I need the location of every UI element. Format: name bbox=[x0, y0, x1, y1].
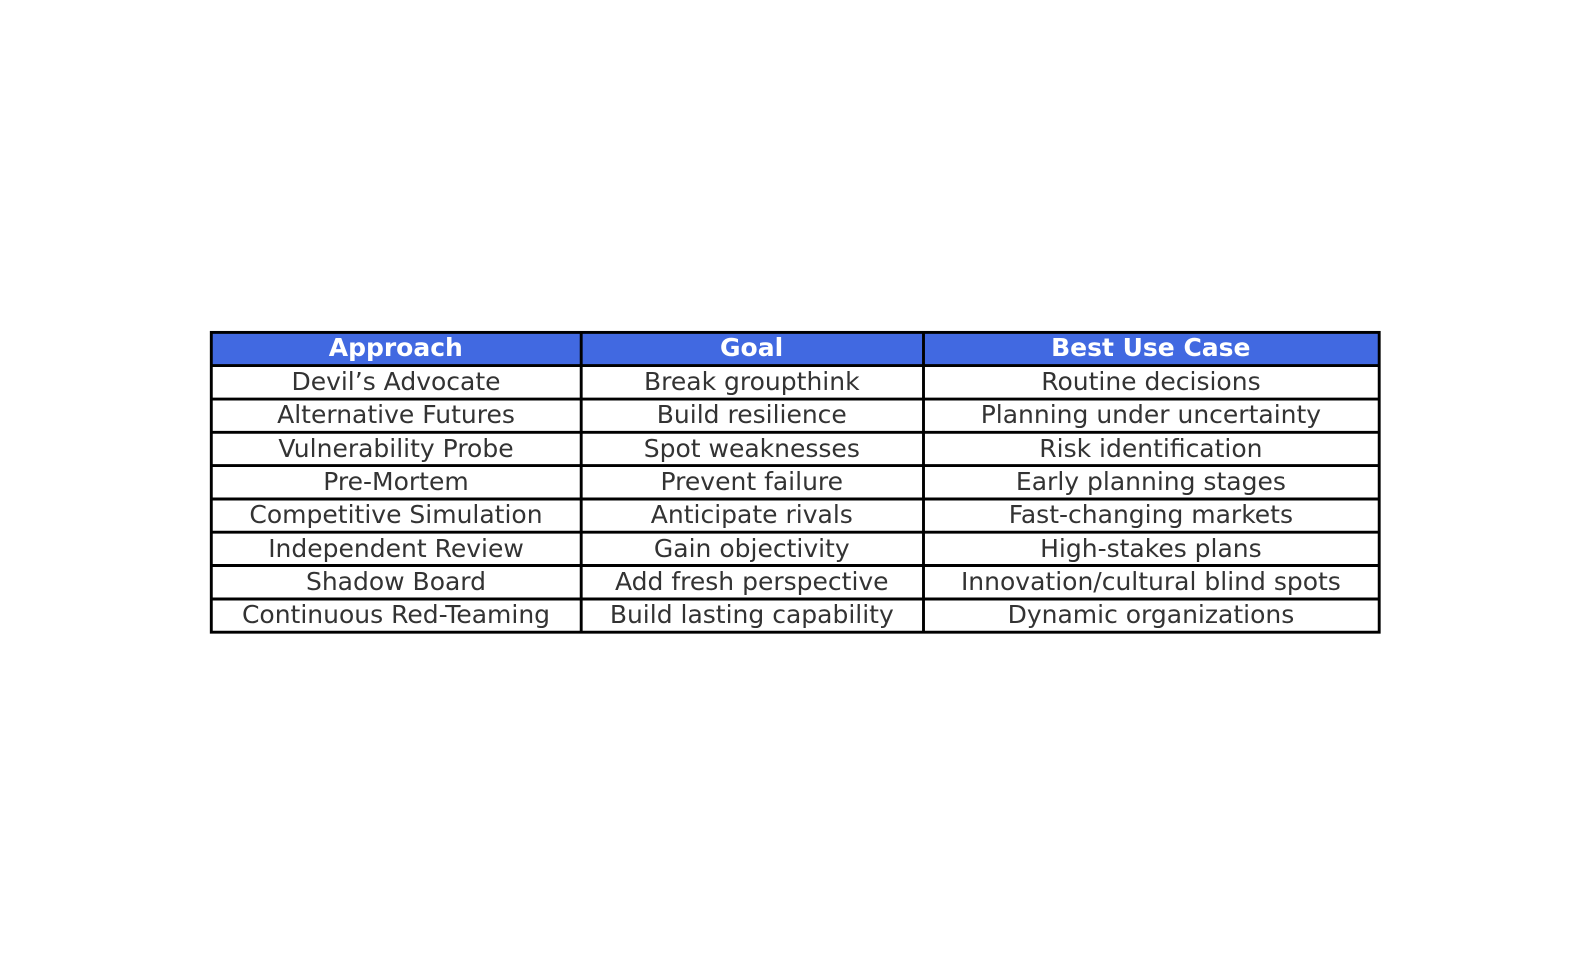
column: approach: Continuous Red-Teaming bbox=[242, 600, 550, 629]
column: approach: Competitive Simulation bbox=[249, 500, 543, 529]
column: approach: Independent Review bbox=[268, 534, 524, 563]
column: approach: Alternative Futures bbox=[277, 400, 515, 429]
column: best use case: Innovation/cultural blind spots bbox=[961, 567, 1341, 596]
column: goal: Build lasting capability bbox=[610, 600, 894, 629]
column: goal: Spot weaknesses bbox=[644, 434, 860, 463]
column: goal: Anticipate rivals bbox=[651, 500, 853, 529]
column: best use case: Dynamic organizations bbox=[1008, 600, 1294, 629]
table header row: Approach bbox=[329, 333, 463, 362]
column: best use case: Early planning stages bbox=[1016, 467, 1286, 496]
column: best use case: Routine decisions bbox=[1041, 367, 1261, 396]
table header row: Goal bbox=[720, 333, 783, 362]
column: goal: Break groupthink bbox=[644, 367, 860, 396]
column: best use case: Risk identification bbox=[1039, 434, 1263, 463]
column: goal: Build resilience bbox=[657, 400, 847, 429]
table grid lines bbox=[211, 332, 1379, 632]
column: goal: Gain objectivity bbox=[654, 534, 850, 563]
column: approach: Pre-Mortem bbox=[323, 467, 469, 496]
table header row bbox=[211, 332, 1379, 366]
column: best use case: Planning under uncertainty bbox=[981, 400, 1321, 429]
column: approach: Vulnerability Probe bbox=[278, 434, 514, 463]
column: goal: Prevent failure bbox=[661, 467, 843, 496]
comparison table bbox=[211, 332, 1379, 632]
column: best use case bbox=[961, 367, 1341, 629]
column: goal: Add fresh perspective bbox=[615, 567, 889, 596]
column: goal bbox=[610, 367, 894, 629]
column: approach bbox=[242, 367, 550, 629]
column: best use case: High-stakes plans bbox=[1040, 534, 1262, 563]
column: approach: Shadow Board bbox=[306, 567, 486, 596]
column: approach: Devil’s Advocate bbox=[291, 367, 501, 396]
column: best use case: Fast-changing markets bbox=[1009, 500, 1293, 529]
table header row: Best Use Case bbox=[1051, 333, 1251, 362]
